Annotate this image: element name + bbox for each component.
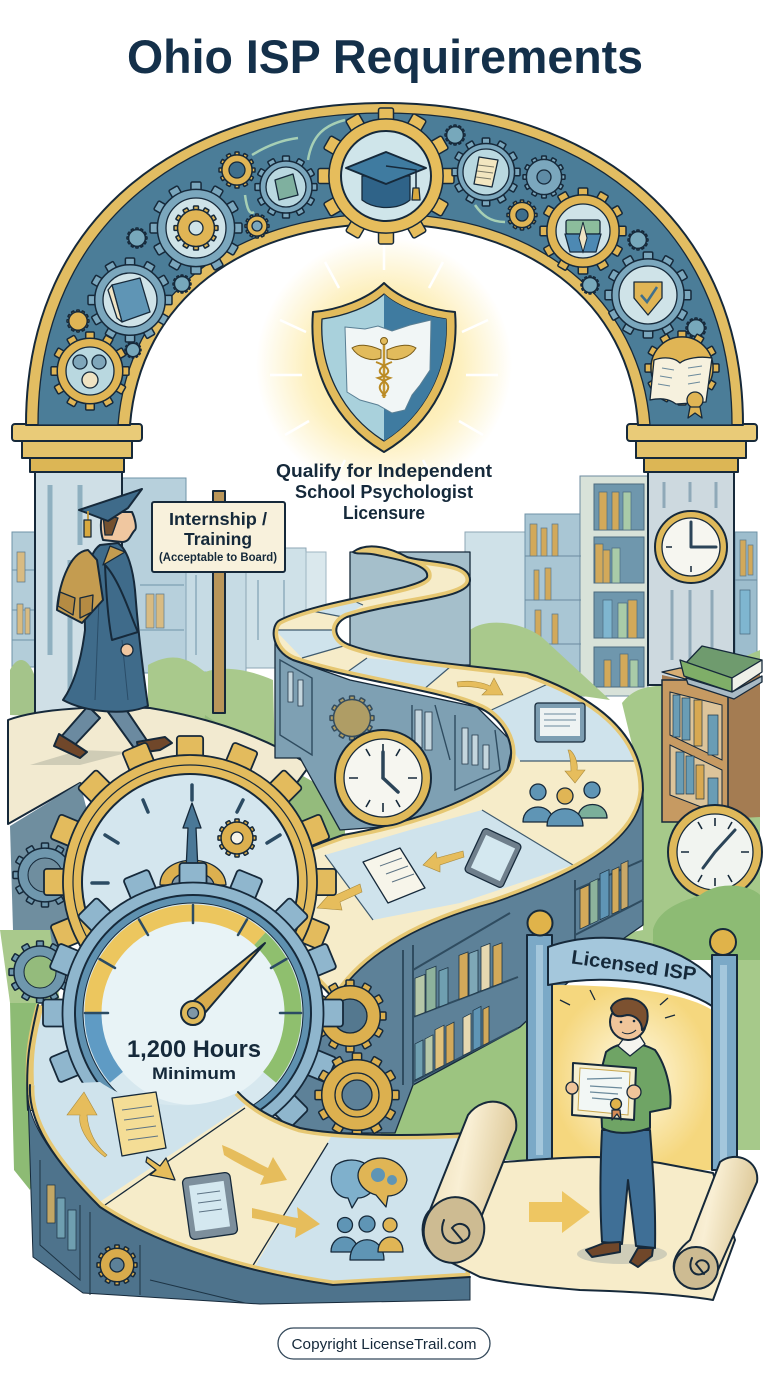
gauge reading: Minimum: [152, 1064, 236, 1083]
arch with gears: [26, 103, 743, 425]
arch gear: green book: [255, 156, 317, 218]
gauge needle: [181, 943, 265, 1025]
gate: licensed ISP: [527, 910, 737, 1170]
sign: internship / training: [152, 491, 285, 713]
caption: qualify for licensure: [276, 460, 492, 523]
road icon tablet upper: [535, 703, 585, 742]
left walking path: [8, 707, 310, 860]
bookshelf wall: under road right: [240, 790, 643, 1133]
gold edge on left strip: [30, 1005, 40, 1110]
lower road notepad: [112, 1092, 166, 1156]
green strip behind gold gauge: [200, 715, 345, 870]
green lawn bottom center: [380, 1020, 530, 1160]
road icon tablet middle: [464, 827, 522, 889]
clock: road center: [335, 730, 431, 826]
arch gear: open book with ribbon: [645, 331, 719, 418]
scroll arrow: [529, 1191, 590, 1233]
sign: internship / training: Internship /: [169, 509, 267, 529]
gears left edge: [0, 843, 77, 1003]
title: Ohio ISP Requirements: [127, 30, 643, 83]
right column: [627, 424, 757, 685]
lower road arrow up: [67, 1092, 107, 1157]
winding road: lower loop: [30, 1082, 470, 1285]
winding road: left strip: [27, 1003, 110, 1110]
bookshelf wall under upper road: [275, 638, 513, 830]
arch gear: small right trio: [507, 156, 565, 230]
skyline: right buildings: [465, 476, 757, 696]
skyline: left buildings: [12, 478, 326, 673]
gate banner: Licensed ISP: [570, 946, 698, 986]
gear beside gauge lower: [315, 1053, 399, 1137]
blue gauge (lower): [43, 863, 343, 1163]
graduate figure: [30, 489, 172, 765]
arch gear: small gold pair: [219, 152, 269, 238]
dark area behind gauge: [10, 783, 110, 965]
road icon notebook: [363, 848, 425, 903]
road arrow lower: [317, 884, 362, 910]
left green edge: [10, 1003, 38, 1190]
arch gear: masks: [51, 332, 129, 410]
gear beside gauge upper: [314, 980, 386, 1052]
clock: lower right: [668, 805, 762, 899]
top road wall: [350, 552, 470, 665]
arch gear: book: [88, 258, 172, 342]
arch gear: gear inside gear: [150, 182, 242, 274]
scroll sheet: [450, 1157, 735, 1300]
copyright pill: [278, 1328, 490, 1359]
winding road: upper section: [240, 546, 643, 1000]
arch gear: notepad: [452, 138, 520, 206]
arch gear: small gold left: [67, 310, 89, 332]
arch decorative tiny gears and arrows: [125, 125, 706, 358]
licensed person holding certificate: [566, 998, 670, 1267]
gate banner: [548, 938, 712, 1006]
sign: internship / training: Training: [184, 529, 252, 549]
bookshelf wall: lower left: [28, 1095, 470, 1304]
clock: right column: [655, 511, 727, 583]
green hills background: [10, 623, 760, 1150]
sign: internship / training: (Acceptable to Board): [159, 552, 277, 564]
caption: qualify for licensure: School Psychologist: [295, 481, 473, 502]
left column: [12, 424, 142, 715]
bush: over lower right clock: [653, 886, 760, 960]
lower road arrow right 2: [252, 1207, 320, 1238]
left scroll roll: [416, 1102, 516, 1270]
lower road arrow: [146, 1157, 175, 1180]
arch gear: central graduation cap: [318, 108, 454, 244]
gauge reading: 1,200 Hours: [127, 1036, 261, 1063]
lower road arrow right: [222, 1145, 287, 1185]
certificate: [566, 1063, 641, 1120]
lower road tablet: [182, 1172, 238, 1240]
road arrow middle: [423, 851, 464, 872]
road arrow down: [565, 750, 585, 783]
gold gauge (upper): [44, 736, 336, 1028]
caption: qualify for licensure: Qualify for Independent: [276, 460, 492, 481]
road icon people: [523, 782, 607, 826]
right scroll roll: [674, 1157, 757, 1289]
arch gear: briefcase: [540, 188, 626, 274]
copyright pill: Copyright LicenseTrail.com: [292, 1337, 476, 1353]
seal: glow, shield and Ohio caduceus: [256, 237, 512, 493]
caption: qualify for licensure: Licensure: [343, 502, 425, 523]
road arrow upper: [457, 678, 503, 695]
black edge on left strip: [27, 1005, 38, 1110]
lower road people and speech bubbles: [331, 1158, 407, 1260]
bookshelf: right: [662, 646, 762, 822]
arch gear: shield award: [605, 252, 691, 338]
gauge reading: [127, 1036, 261, 1083]
